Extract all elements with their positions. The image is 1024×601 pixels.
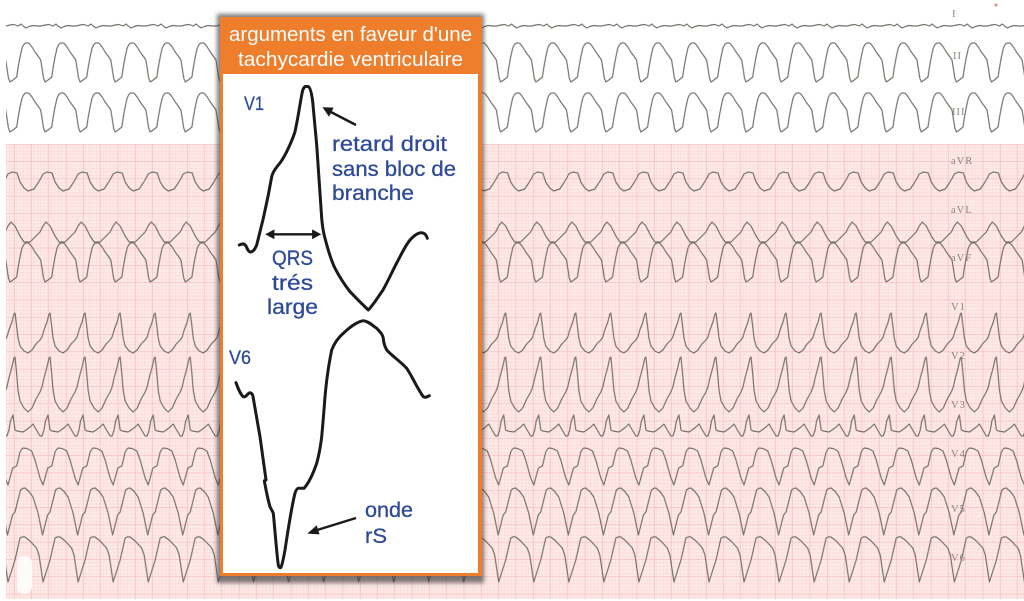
- text: QRS très large: [267, 246, 318, 319]
- lead labels: V2: [951, 351, 966, 362]
- heading: tachycardie ventriculaire: [238, 48, 463, 71]
- arrow: onde rS: [308, 518, 356, 534]
- ECG trace: lead V5: [6, 484, 1024, 539]
- label: V6: V6: [229, 347, 251, 369]
- white smudge: [17, 556, 32, 594]
- label: V1: V1: [244, 93, 264, 115]
- text: onde rS: onde: [365, 498, 413, 522]
- ECG trace: lead V2: [6, 353, 1024, 416]
- lead labels: aVF: [951, 253, 972, 264]
- lead labels: V4: [951, 449, 966, 460]
- text: QRS très large: trés: [272, 271, 313, 295]
- ECG trace: lead III: [6, 90, 1024, 136]
- panel body: [223, 74, 478, 573]
- ECG trace: lead aVF: [6, 240, 1024, 286]
- ECG trace: lead V6: [6, 533, 1024, 586]
- ECG graph paper: [6, 144, 1024, 599]
- lead labels: V3: [951, 400, 966, 411]
- lead labels: I: [952, 9, 956, 20]
- ECG trace: lead V3: [6, 411, 1024, 441]
- text: QRS très large: large: [267, 295, 318, 319]
- arrow: retard droit: [323, 108, 356, 125]
- ECG trace: lead aVL: [6, 218, 1024, 246]
- lead labels: [951, 9, 973, 564]
- lead labels: III: [952, 107, 966, 118]
- arrow: QRS width: [266, 230, 320, 239]
- text: retard droit sans bloc de branche: retard droit: [332, 132, 447, 156]
- lead labels: II: [953, 51, 962, 62]
- text: retard droit sans bloc de branche: branche: [332, 181, 414, 205]
- red speck: [994, 4, 998, 6]
- text: onde rS: rS: [365, 524, 387, 548]
- ECG trace: lead aVR: [6, 168, 1024, 194]
- lead labels: aVR: [951, 156, 973, 167]
- ECG trace: lead I: [6, 18, 1024, 34]
- curve: V6 complex: [236, 321, 429, 568]
- lead labels: V6: [951, 553, 966, 564]
- lead labels: V1: [951, 302, 966, 313]
- panel shadow: [217, 14, 484, 583]
- text: retard droit sans bloc de branche: sans bloc de: [332, 157, 456, 181]
- text: QRS très large: QRS: [272, 246, 313, 270]
- lead labels: V5: [951, 504, 966, 515]
- lead labels: aVL: [951, 205, 973, 216]
- heading: [229, 23, 472, 71]
- ECG trace: lead II: [6, 40, 1024, 86]
- heading: arguments en faveur d'une: [229, 23, 472, 46]
- ECG trace: lead V1: [6, 309, 1024, 357]
- text: retard droit sans bloc de branche: [332, 132, 456, 205]
- panel: VT arguments: [217, 14, 484, 583]
- ECG trace: lead V4: [6, 444, 1024, 489]
- panel frame: [220, 17, 482, 576]
- curve: V1 complex: [239, 86, 427, 310]
- text: onde rS: [365, 498, 413, 548]
